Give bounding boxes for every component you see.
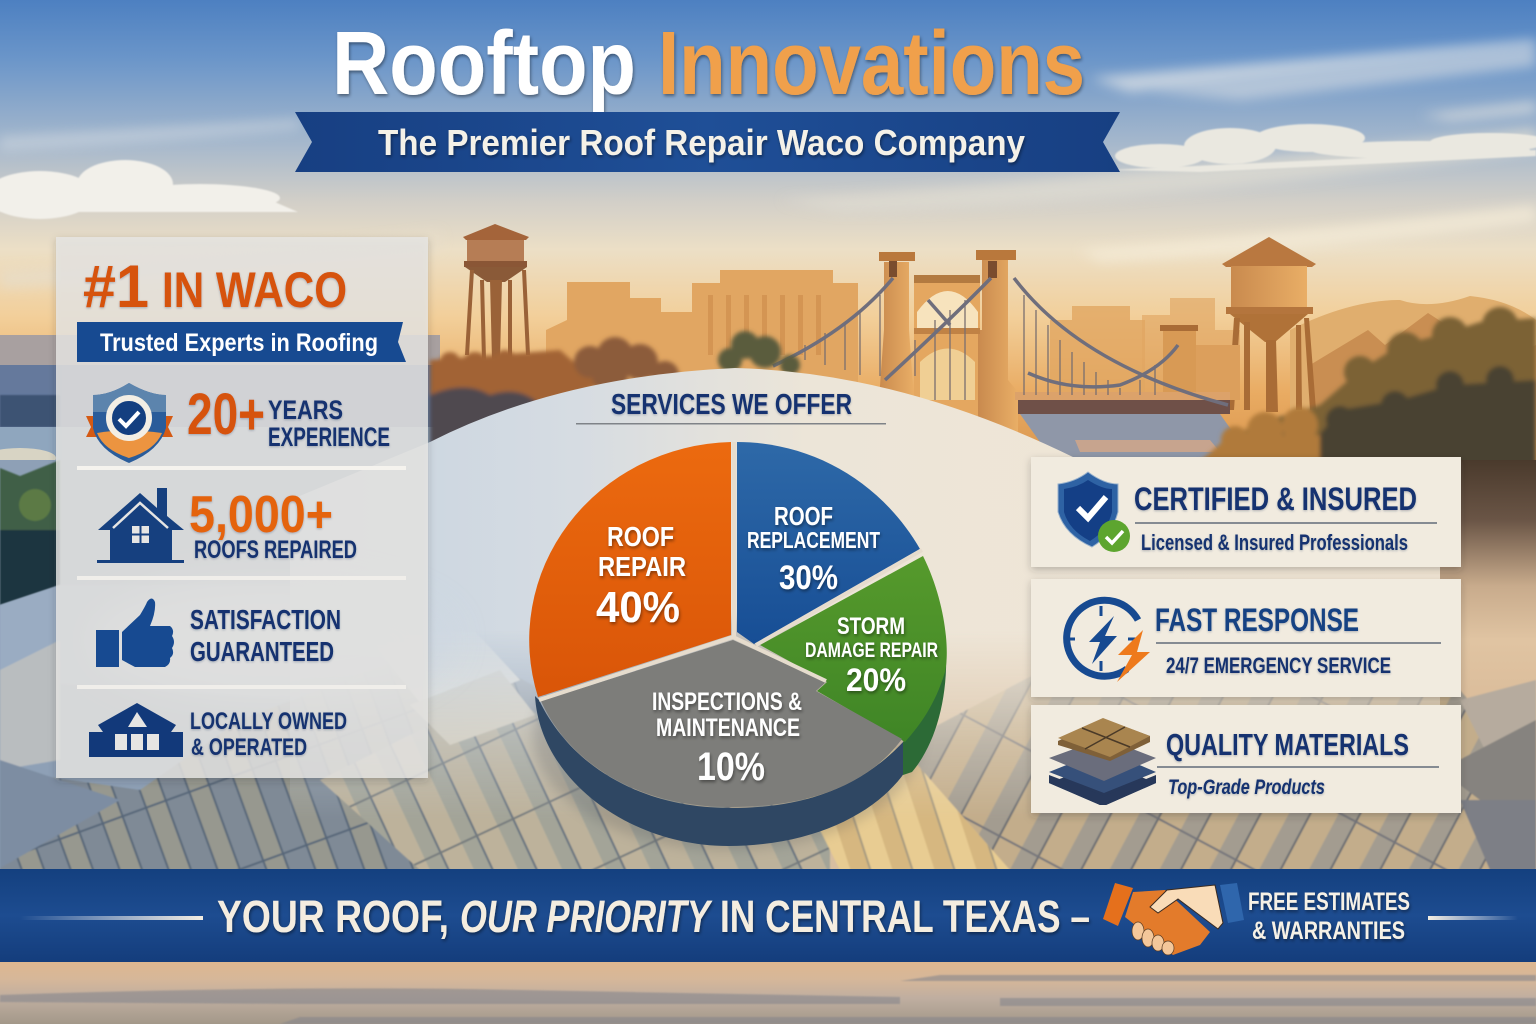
bridge bbox=[773, 250, 1240, 440]
card: quality materials bbox=[1031, 705, 1461, 813]
slice: inspections bbox=[541, 640, 902, 807]
icon: shield with check bbox=[86, 383, 173, 463]
right water tower bbox=[1222, 237, 1316, 412]
labels: 40% bbox=[596, 583, 680, 632]
text: satisfaction guaranteed bbox=[190, 604, 341, 667]
title: Innovations bbox=[658, 14, 1085, 114]
labels: DAMAGE REPAIR bbox=[805, 639, 938, 662]
mist hill bbox=[290, 368, 1440, 830]
icon: material stack bbox=[1049, 718, 1156, 805]
heading: services we offer: SERVICES WE OFFER bbox=[611, 389, 852, 421]
pie side bbox=[535, 696, 905, 846]
text: FAST RESPONSE bbox=[1155, 602, 1359, 638]
slogan: YOUR ROOF, bbox=[217, 891, 449, 942]
heading: #1 in Waco: IN WACO bbox=[162, 262, 347, 318]
roof planes bbox=[0, 585, 1536, 870]
slice: roof replacement bbox=[737, 442, 920, 644]
stat: 20+ years experience: 20+ bbox=[187, 382, 265, 447]
labels: ROOF bbox=[774, 501, 833, 531]
card: certified and insured bbox=[1031, 457, 1461, 567]
subtitle ribbon bbox=[295, 112, 1120, 172]
ground bbox=[0, 460, 1536, 880]
panel: services pie chart bbox=[529, 389, 947, 850]
stat: 20+ years experience: YEARS bbox=[268, 395, 343, 425]
slogan: OUR PRIORITY bbox=[460, 891, 713, 942]
panel: credentials bbox=[56, 237, 428, 778]
text: locally owned: & OPERATED bbox=[191, 734, 307, 761]
text: QUALITY MATERIALS bbox=[1166, 727, 1409, 762]
labels: 10% bbox=[697, 745, 765, 789]
left trees bbox=[0, 460, 60, 605]
tree lines bbox=[430, 307, 1536, 470]
slice: roof repair bbox=[529, 442, 731, 697]
slogan: IN CENTRAL TEXAS – bbox=[720, 891, 1090, 942]
icon: clock with lightning bbox=[1067, 600, 1150, 682]
stat: 20+ years experience bbox=[187, 382, 390, 452]
text bbox=[1155, 602, 1391, 678]
text: free estimates bbox=[1248, 888, 1410, 945]
title bbox=[332, 14, 1085, 114]
icon: thumbs up bbox=[96, 598, 174, 667]
labels: INSPECTIONS & bbox=[652, 688, 802, 716]
ribbon: trusted experts: Trusted Experts in Roofing bbox=[100, 329, 378, 357]
subtitle ribbon: The Premier Roof Repair Waco Company bbox=[378, 122, 1025, 163]
slice: storm damage bbox=[760, 556, 947, 742]
labels bbox=[596, 501, 938, 789]
labels: ROOF bbox=[607, 521, 674, 552]
text: 24/7 EMERGENCY SERVICE bbox=[1166, 653, 1391, 678]
text: satisfaction guaranteed: SATISFACTION bbox=[190, 604, 341, 635]
icon: handshake bbox=[1103, 883, 1244, 955]
skyline bbox=[546, 270, 1240, 410]
labels: REPLACEMENT bbox=[747, 527, 880, 553]
card: fast response bbox=[1031, 579, 1461, 697]
icon: house bbox=[97, 488, 184, 563]
cloud left bbox=[0, 160, 298, 219]
pie chart bbox=[529, 442, 947, 850]
icon: local building bbox=[89, 703, 183, 757]
heading: #1 in Waco: #1 bbox=[83, 253, 149, 320]
labels: REPAIR bbox=[598, 551, 686, 582]
left horizon bbox=[0, 335, 440, 468]
text bbox=[1134, 481, 1417, 555]
cloud right bbox=[1110, 124, 1536, 172]
labels: MAINTENANCE bbox=[656, 714, 800, 742]
text: locally owned bbox=[190, 708, 347, 761]
labels: 30% bbox=[779, 559, 838, 597]
stat: 20+ years experience: EXPERIENCE bbox=[268, 422, 390, 452]
text: locally owned: LOCALLY OWNED bbox=[190, 708, 347, 735]
text: CERTIFIED & INSURED bbox=[1134, 481, 1417, 517]
ribbon: trusted experts bbox=[77, 322, 406, 362]
river bbox=[1020, 414, 1260, 470]
text: free estimates: & WARRANTIES bbox=[1252, 917, 1405, 945]
bottom banner bbox=[0, 869, 1536, 962]
icon: shield bbox=[1058, 472, 1130, 552]
text bbox=[1166, 727, 1409, 799]
left water tower bbox=[463, 224, 530, 360]
title: Rooftop bbox=[332, 14, 636, 114]
bottom strip bbox=[0, 960, 1536, 1024]
heading: #1 in Waco bbox=[83, 253, 347, 320]
text: Top-Grade Products bbox=[1168, 776, 1325, 799]
labels: STORM bbox=[837, 613, 905, 640]
text: Licensed & Insured Professionals bbox=[1141, 530, 1408, 555]
stat: 5,000+ roofs repaired: ROOFS REPAIRED bbox=[194, 536, 357, 564]
text: satisfaction guaranteed: GUARANTEED bbox=[190, 636, 334, 667]
stat: 5,000+ roofs repaired: 5,000+ bbox=[189, 486, 333, 544]
text: free estimates: FREE ESTIMATES bbox=[1248, 888, 1410, 916]
labels: 20% bbox=[846, 662, 906, 698]
distant hills bbox=[1290, 296, 1536, 440]
